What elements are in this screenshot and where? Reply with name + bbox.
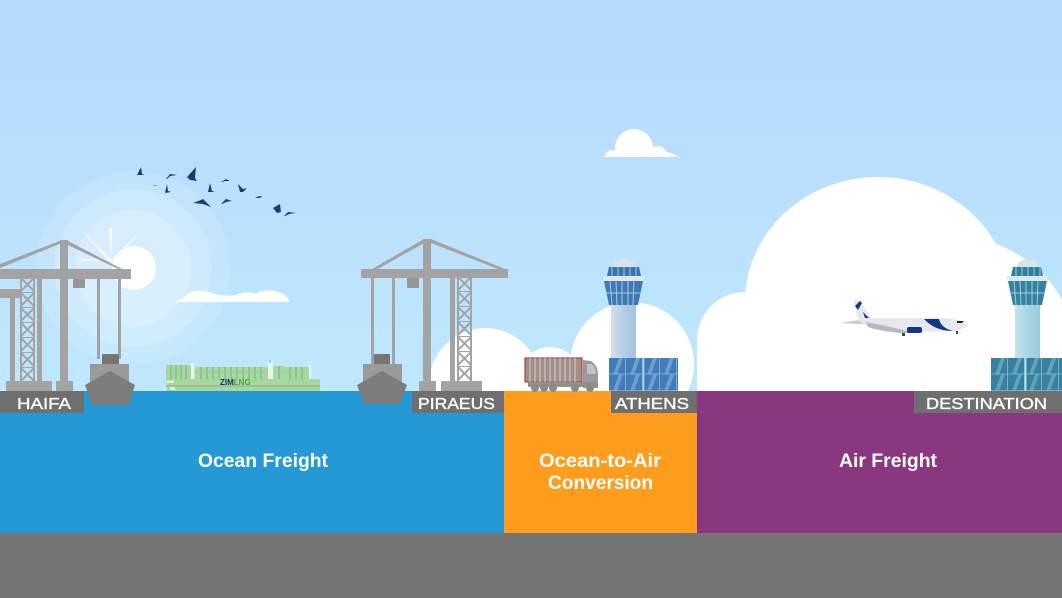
cloud behind Athens tower xyxy=(429,302,694,440)
label: Piraeus xyxy=(412,391,504,413)
large cloud behind air freight xyxy=(697,177,1062,483)
Haifa docked ship xyxy=(85,354,135,405)
label: Haifa: HAIFA xyxy=(17,396,71,413)
grey ground strip xyxy=(0,533,1062,598)
heading: Air Freight: Air Freight xyxy=(839,451,938,472)
ocean freight panel xyxy=(0,391,504,533)
Athens control tower and terminal xyxy=(603,259,678,391)
ship livery ZIM LNG: ZIMLNG xyxy=(220,378,251,387)
Piraeus crane xyxy=(361,239,508,391)
cargo airplane xyxy=(840,299,968,336)
label: Athens: ATHENS xyxy=(615,396,689,413)
ocean-to-air conversion panel xyxy=(504,391,697,533)
air freight panel xyxy=(697,391,1062,533)
label: Piraeus: PIRAEUS xyxy=(418,396,495,413)
small cloud near sun xyxy=(175,290,290,302)
heading: Ocean-to-Air Conversion: Ocean-to-Air xyxy=(539,451,662,472)
label: Destination xyxy=(914,391,1062,413)
label: Athens xyxy=(611,391,697,413)
label: Destination: DESTINATION xyxy=(926,396,1047,413)
ZIM LNG container ship xyxy=(166,360,320,391)
flock of birds xyxy=(137,167,296,216)
small cloud top xyxy=(603,129,679,157)
Piraeus docked ship xyxy=(357,354,407,404)
heading: Ocean-to-Air Conversion xyxy=(539,451,662,494)
sun with glow rings xyxy=(36,171,230,365)
sky background xyxy=(0,0,1062,392)
container truck xyxy=(525,358,598,392)
destination control tower and terminal xyxy=(991,259,1062,391)
heading: Ocean-to-Air Conversion: Conversion xyxy=(548,473,653,494)
heading: Ocean Freight: Ocean Freight xyxy=(198,451,329,472)
Haifa crane xyxy=(0,240,131,391)
label: Haifa xyxy=(0,391,84,413)
